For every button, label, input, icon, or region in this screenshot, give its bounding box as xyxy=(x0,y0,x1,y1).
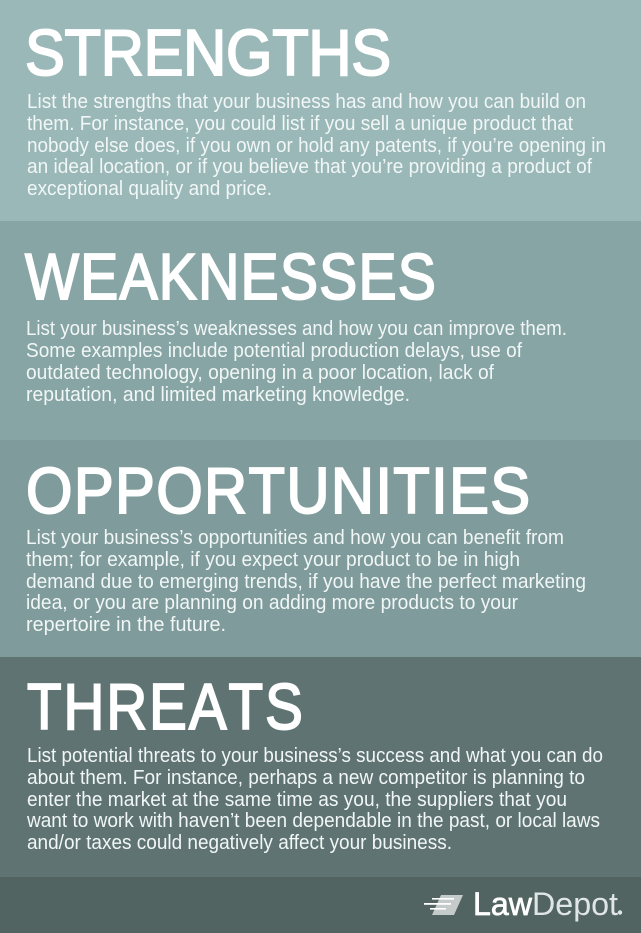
icon: LawDepot mark xyxy=(424,895,463,915)
text block: opportunities description: List your business’s opportunities and how you can benefit from xyxy=(26,527,564,549)
footer band xyxy=(0,877,641,933)
logo wordmark: Depot xyxy=(532,886,618,922)
text block: strengths description: exceptional quality and price. xyxy=(27,178,272,200)
text block: strengths description: List the strengths that your business has and how you can build on xyxy=(27,91,586,113)
text block: strengths description: nobody else does, if you own or hold any patents, if you’re opening in xyxy=(27,135,606,157)
text block: strengths description xyxy=(27,91,606,200)
heading: opportunities: OPPORTUNITIES xyxy=(26,455,530,528)
heading: weaknesses: WEAKNESSES xyxy=(25,241,436,313)
text block: opportunities description: idea, or you are planning on adding more products to your xyxy=(26,592,518,614)
heading: threats: THREATS xyxy=(27,670,303,743)
text block: weaknesses description xyxy=(26,318,567,406)
logo wordmark: Law xyxy=(473,886,533,922)
panel: weaknesses xyxy=(0,221,641,440)
text block: threats description: and/or taxes could negatively affect your business. xyxy=(27,832,452,854)
text block: opportunities description: them; for example, if you expect your product to be in high xyxy=(26,549,520,571)
logo: LawDepot xyxy=(424,886,622,922)
text block: threats description: enter the market at the same time as you, the suppliers that you xyxy=(27,789,567,811)
panel: opportunities xyxy=(0,440,641,657)
text block: weaknesses description: outdated technology, opening in a poor location, lack of xyxy=(26,362,494,384)
text block: threats description: want to work with haven’t been dependable in the past, or local laws xyxy=(26,810,600,832)
text block: opportunities description xyxy=(26,527,586,636)
text block: threats description: about them. For instance, perhaps a new competitor is planning to xyxy=(27,767,585,789)
text block: threats description: List potential threats to your business’s success and what you can do xyxy=(27,745,603,767)
text block: weaknesses description: reputation, and limited marketing knowledge. xyxy=(26,384,410,406)
text block: opportunities description: demand due to emerging trends, if you have the perfect marketing xyxy=(26,571,586,593)
registered mark xyxy=(618,910,622,915)
text block: strengths description: them. For instance, you could list if you sell a unique product that xyxy=(27,113,573,135)
text block: strengths description: an ideal location, or if you believe that you’re providing a product of xyxy=(27,156,592,178)
text block: opportunities description: repertoire in the future. xyxy=(26,614,226,636)
text block: weaknesses description: Some examples include potential production delays, use of xyxy=(26,340,522,362)
text block: weaknesses description: List your business’s weaknesses and how you can improve them. xyxy=(26,318,567,340)
heading: strengths: STRENGTHS xyxy=(25,17,391,90)
panel: strengths xyxy=(0,0,641,221)
panel: threats xyxy=(0,657,641,877)
text block: threats description xyxy=(26,745,603,854)
